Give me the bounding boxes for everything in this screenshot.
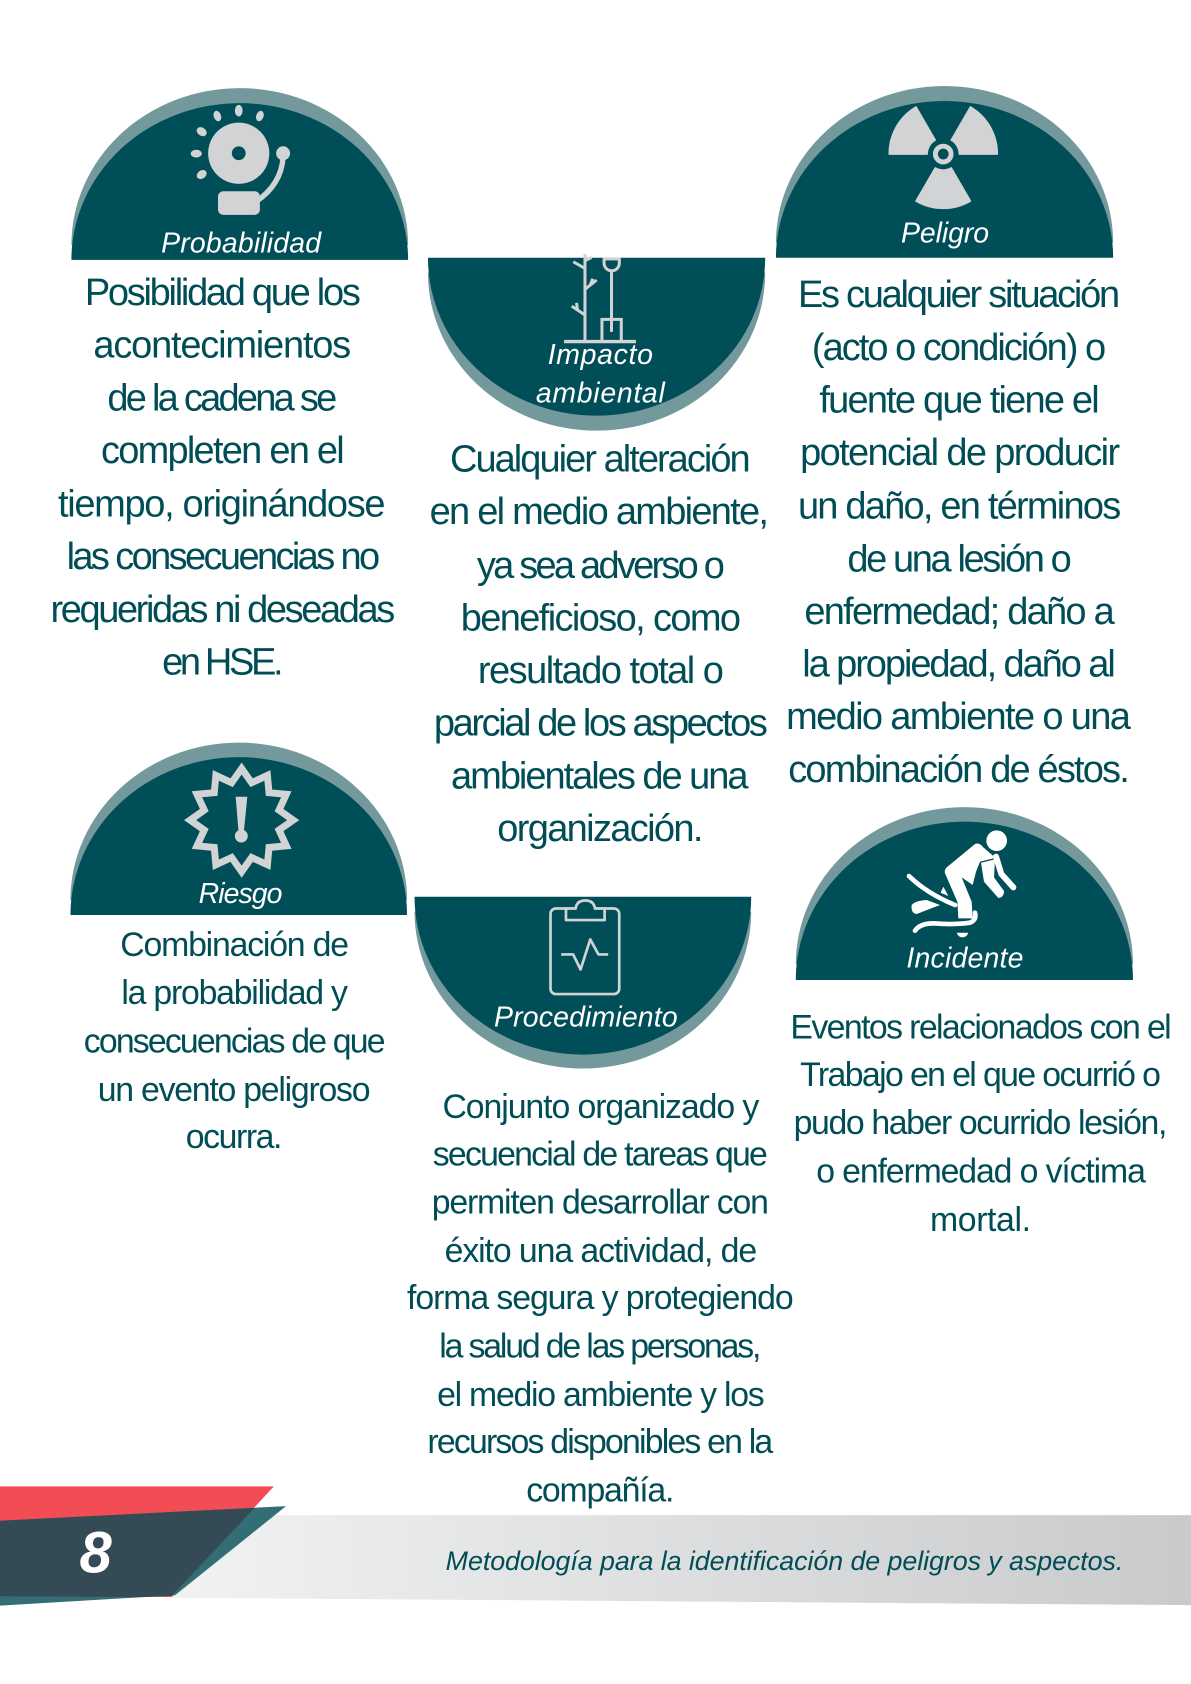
- text: Peligro definition: enfermedad; daño a: [804, 591, 1116, 633]
- text: Riesgo definition: ocurra.: [186, 1118, 282, 1156]
- footer: dark overlap shape: [0, 1508, 255, 1597]
- dome: Probabilidad: [71, 88, 408, 260]
- footer: red shape: [0, 1486, 274, 1597]
- text: Probabilidad definition: Posibilidad que los: [85, 272, 361, 314]
- text: Probabilidad definition: las consecuencias no: [67, 536, 380, 578]
- text: Impacto ambiental definition: en el medio ambiente,: [430, 491, 769, 533]
- text: Procedimiento definition: compañía.: [526, 1471, 674, 1509]
- text: Riesgo definition: [84, 926, 386, 1156]
- text: Impacto ambiental definition: beneficioso, como: [461, 597, 741, 639]
- label: Riesgo: Riesgo: [199, 878, 282, 910]
- footer band: [0, 1486, 1191, 1606]
- dome: Impacto ambiental: [428, 258, 765, 431]
- text: Procedimiento definition: permiten desarrollar con: [432, 1184, 769, 1222]
- label: Procedimiento: Procedimiento: [494, 1002, 678, 1034]
- text: Impacto ambiental definition: organización.: [497, 808, 703, 850]
- panel: Procedimiento: [407, 897, 794, 1509]
- text: Peligro definition: [786, 274, 1132, 791]
- text: Impacto ambiental definition: Cualquier alteración: [450, 438, 751, 480]
- icon: alarm bell: [191, 105, 290, 215]
- panel: Impacto ambiental: [428, 254, 769, 850]
- text: Procedimiento definition: recursos disponibles en la: [427, 1423, 773, 1461]
- text: Riesgo definition: Combinación de: [120, 926, 349, 964]
- footer title: Metodología para la identificación de peligros y aspectos.: [446, 1546, 1123, 1576]
- text: Probabilidad definition: completen en el: [101, 430, 345, 472]
- label: Peligro: Peligro: [901, 218, 989, 250]
- text: Riesgo definition: consecuencias de que: [84, 1022, 386, 1060]
- text: Impacto ambiental definition: ambientales de una: [451, 755, 749, 797]
- footer: teal shape: [0, 1506, 286, 1606]
- text: Peligro definition: combinación de éstos.: [788, 749, 1130, 791]
- text: Probabilidad definition: [50, 272, 395, 683]
- text: Incidente definition: Eventos relacionados con el: [790, 1009, 1172, 1047]
- text: Probabilidad definition: acontecimientos: [93, 325, 351, 367]
- icon: radiation symbol: [889, 107, 997, 208]
- icon: plant and shovel: [564, 254, 636, 342]
- text: Peligro definition: un daño, en términos: [798, 486, 1121, 528]
- dome: Incidente: [796, 807, 1133, 980]
- label: Probabilidad: Probabilidad: [161, 227, 322, 259]
- text: Procedimiento definition: forma segura y protegiendo: [407, 1279, 794, 1317]
- text: Impacto ambiental definition: [430, 438, 769, 850]
- text: Probabilidad definition: de la cadena se: [107, 377, 337, 419]
- dome: Riesgo: [70, 743, 407, 915]
- text: Peligro definition: Es cualquier situación: [798, 274, 1120, 316]
- label: Impacto ambiental: Impacto: [548, 339, 653, 371]
- text: Impacto ambiental definition: ya sea adverso o: [477, 545, 725, 587]
- footer: grey gradient strip: [172, 1515, 1191, 1605]
- text: Riesgo definition: la probabilidad y: [121, 974, 348, 1012]
- dome: Peligro: [776, 86, 1113, 258]
- icon: person slipping: [909, 830, 1013, 937]
- text: Procedimiento definition: secuencial de tareas que: [433, 1135, 768, 1173]
- text: Peligro definition: de una lesión o: [847, 538, 1072, 580]
- text: Incidente definition: Trabajo en el que ocurrió o: [800, 1056, 1161, 1094]
- panel: Probabilidad: [50, 88, 408, 683]
- text: Procedimiento definition: el medio ambiente y los: [437, 1376, 765, 1414]
- icon: clipboard with pulse: [551, 901, 619, 994]
- panel: Incidente: [790, 807, 1172, 1239]
- text: Probabilidad definition: tiempo, originándose: [58, 484, 386, 526]
- panel: Riesgo: [70, 743, 407, 1156]
- text: Incidente definition: pudo haber ocurrido lesión,: [794, 1104, 1167, 1142]
- text: Procedimiento definition: éxito una actividad, de: [445, 1232, 757, 1270]
- text: Peligro definition: (acto o condición) o: [812, 327, 1106, 369]
- text: Incidente definition: o enfermedad o víctima: [816, 1152, 1146, 1190]
- text: Peligro definition: la propiedad, daño al: [802, 644, 1116, 686]
- text: Incidente definition: mortal.: [930, 1201, 1031, 1239]
- text: Peligro definition: medio ambiente o una: [786, 696, 1132, 738]
- text: Incidente definition: [790, 1009, 1172, 1239]
- label: Impacto ambiental: ambiental: [536, 378, 665, 410]
- icon: warning star: [190, 769, 293, 872]
- text: Impacto ambiental definition: parcial de los aspectos: [434, 703, 768, 745]
- text: Procedimiento definition: [407, 1088, 794, 1509]
- dome: Procedimiento: [415, 897, 751, 1069]
- label: Incidente: Incidente: [906, 943, 1023, 975]
- text: Procedimiento definition: la salud de las personas,: [439, 1327, 761, 1365]
- text: Peligro definition: fuente que tiene el: [819, 379, 1100, 421]
- text: Peligro definition: potencial de producir: [800, 432, 1120, 474]
- page number: 8: [79, 1521, 112, 1585]
- label: Impacto ambiental: [536, 339, 665, 410]
- text: Riesgo definition: un evento peligroso: [98, 1071, 371, 1109]
- text: Probabilidad definition: en HSE.: [162, 641, 284, 683]
- panel: Peligro: [776, 86, 1132, 791]
- text: Procedimiento definition: Conjunto organizado y: [442, 1088, 759, 1126]
- text: Probabilidad definition: requeridas ni deseadas: [50, 589, 395, 631]
- text: Impacto ambiental definition: resultado total o: [478, 650, 724, 692]
